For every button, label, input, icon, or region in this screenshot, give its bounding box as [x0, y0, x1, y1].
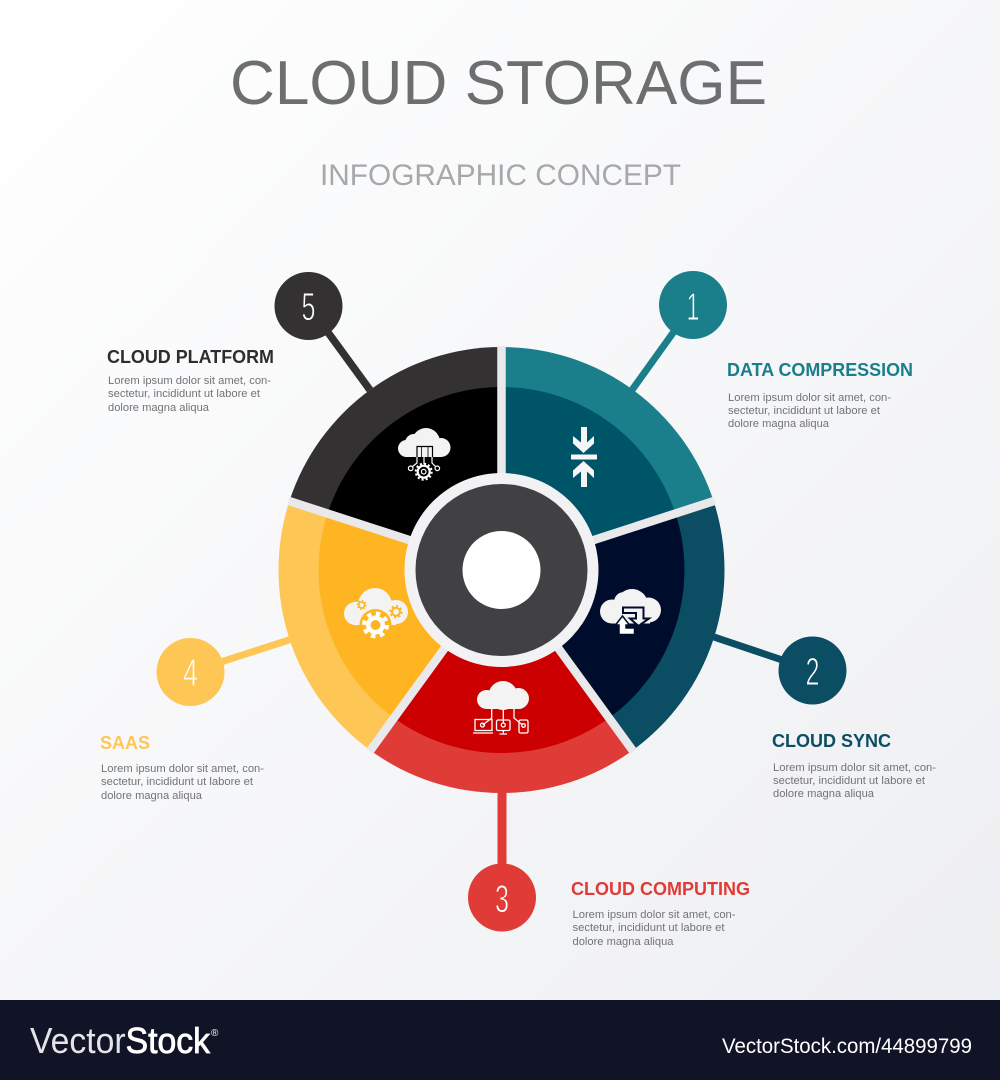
icon: cloud gears [344, 588, 408, 641]
text block: cloud platform: CLOUD PLATFORM [107, 346, 274, 367]
segment 3 outer [370, 570, 633, 793]
badge 4 [156, 638, 224, 706]
badge 1: 1 [686, 286, 700, 329]
center ring [404, 473, 598, 667]
segment 4 inner [319, 514, 502, 718]
badge 4: 4 [183, 652, 198, 695]
center dark ring [416, 484, 588, 656]
text block: cloud platform: dolore magna aliqua [108, 402, 210, 414]
text block: cloud sync [772, 730, 936, 800]
segment 2 inner [502, 514, 684, 718]
segment 1 inner [502, 387, 676, 570]
text block: data compression: DATA COMPRESSION [727, 359, 913, 380]
donut chart [278, 346, 725, 793]
icon: cloud computing [473, 681, 529, 734]
text block: cloud platform: sectetur, incididunt ut labore et [108, 388, 261, 400]
text block: cloud computing: Lorem ipsum dolor sit amet, con- [572, 909, 736, 921]
text block: cloud sync: Lorem ipsum dolor sit amet, con- [773, 762, 936, 774]
connector 4 [190, 639, 292, 672]
text block: saas: SAAS [100, 732, 150, 753]
text block: cloud platform: Lorem ipsum dolor sit amet, con- [108, 375, 271, 387]
text block: saas: Lorem ipsum dolor sit amet, con- [101, 763, 264, 775]
segment 1 outer [502, 347, 714, 570]
text block: data compression: dolore magna aliqua [728, 418, 830, 430]
icon: cloud platform [398, 428, 450, 480]
text block: cloud sync: dolore magna aliqua [773, 788, 875, 800]
footer bar [0, 1000, 1000, 1080]
title: CLOUD STORAGE [230, 49, 767, 118]
text block: data compression: sectetur, incididunt ut labore et [728, 405, 881, 417]
connector 2 [714, 637, 812, 670]
registered mark: ® [211, 1028, 219, 1039]
badge 3: 3 [495, 878, 509, 921]
text block: cloud computing: sectetur, incididunt ut labore et [572, 922, 725, 934]
text block: cloud computing: CLOUD COMPUTING [571, 878, 750, 899]
footer url: VectorStock.com/44899799 [722, 1035, 972, 1058]
text block: cloud sync: CLOUD SYNC [772, 730, 891, 751]
text block: saas: sectetur, incididunt ut labore et [101, 776, 254, 788]
badge 2 [778, 636, 846, 704]
text block: saas [100, 732, 264, 802]
badge 5 [274, 272, 342, 340]
text block: cloud platform [107, 346, 274, 414]
subtitle: INFOGRAPHIC CONCEPT [320, 159, 681, 192]
segment 2 outer [502, 501, 725, 750]
text block: cloud computing [571, 878, 750, 948]
footer logo: VectorStock [30, 1020, 211, 1061]
segment 5 inner [328, 387, 502, 570]
icon: cloud sync [600, 589, 661, 634]
text block: data compression: Lorem ipsum dolor sit amet, con- [728, 392, 891, 404]
connector 3 [498, 790, 506, 897]
segment 5 outer [289, 347, 502, 570]
segment 3 inner [394, 570, 609, 753]
icon: compression arrows [571, 427, 597, 487]
text block: saas: dolore magna aliqua [101, 790, 203, 802]
badge 5: 5 [302, 286, 316, 329]
badge 2: 2 [806, 651, 820, 694]
text block: data compression [727, 359, 913, 430]
connector 5 [308, 305, 370, 390]
segment gaps [288, 346, 715, 751]
center hole [462, 531, 540, 609]
badge 1 [659, 271, 727, 339]
text block: cloud computing: dolore magna aliqua [572, 936, 674, 948]
segment 4 outer [278, 501, 502, 750]
connector 1 [632, 305, 693, 390]
text block: cloud sync: sectetur, incididunt ut labore et [773, 775, 926, 787]
badge 3 [468, 864, 536, 932]
